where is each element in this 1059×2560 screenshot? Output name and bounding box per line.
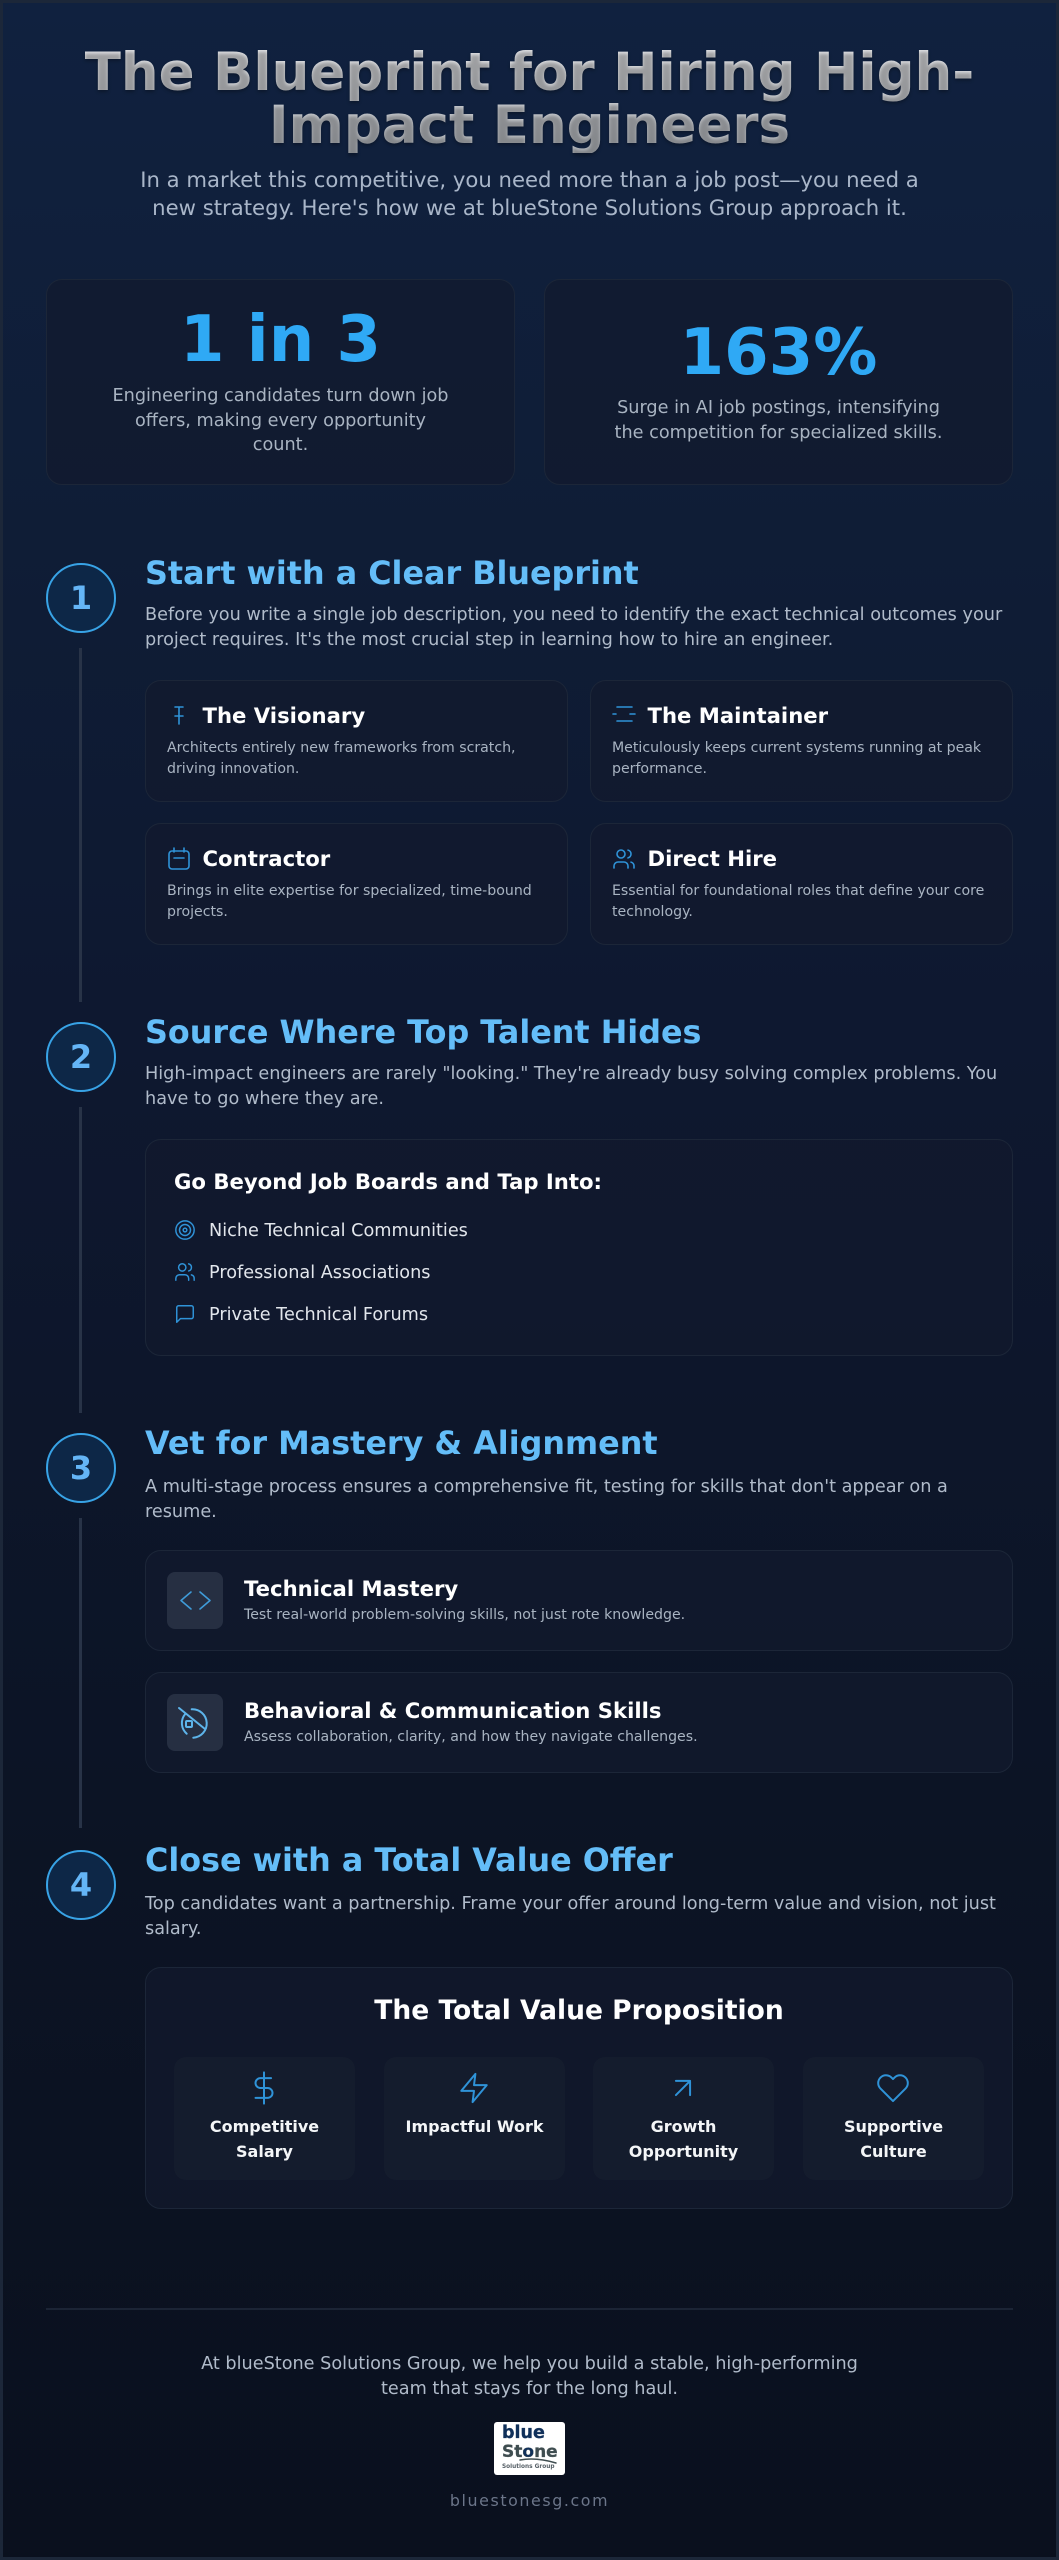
- label: Competitive: [210, 2117, 319, 2136]
- card: Behavioral and Communication Skills: [145, 1672, 1013, 1773]
- icon: dollar: [254, 2071, 274, 2105]
- logo: [494, 2422, 565, 2475]
- card text: [612, 740, 981, 777]
- list item: Professional Associations: [209, 1263, 430, 1283]
- step description: High-impact engineers are rarely "looking." They're already busy solving complex problems. You: [145, 1064, 997, 1084]
- step heading: Start with a Clear Blueprint: [145, 554, 639, 592]
- card text: Test real-world problem-solving skills, not just rote knowledge.: [244, 1606, 685, 1622]
- subtitle: new strategy. Here's how we at blueStone Solutions Group approach it.: [152, 195, 907, 220]
- step number 2: 2: [70, 1038, 92, 1076]
- card title: The Maintainer: [648, 702, 828, 728]
- card text: Essential for foundational roles that define your core: [612, 882, 984, 898]
- icon: calendar: [168, 847, 190, 870]
- label: [629, 2117, 738, 2161]
- card: Total Value Proposition: [145, 1967, 1013, 2209]
- card: The Maintainer: [590, 680, 1013, 802]
- card: Contractor: [145, 823, 568, 945]
- card: The Visionary: [145, 680, 568, 802]
- stat description: [112, 386, 449, 455]
- card text: projects.: [167, 904, 228, 920]
- step number 4: [46, 1850, 116, 1920]
- value: Competitive Salary: [174, 2057, 355, 2180]
- card text: [167, 882, 532, 920]
- section: step 1: [46, 554, 1013, 1002]
- card text: [612, 882, 984, 920]
- value: Growth Opportunity: [593, 2057, 774, 2180]
- icon: arrow up right: [674, 2080, 692, 2096]
- card title: Contractor: [202, 846, 330, 870]
- label: [844, 2117, 943, 2161]
- card: channels list: [145, 1139, 1013, 1356]
- value: Supportive Culture: [803, 2057, 984, 2180]
- step number 4: 4: [70, 1866, 92, 1904]
- stat number: 163%: [680, 316, 877, 390]
- section: step 2: [46, 1014, 1013, 1413]
- icon: users: [175, 1263, 195, 1281]
- card heading: The Total Value Proposition: [374, 1995, 784, 2026]
- step description: have to go where they are.: [145, 1089, 384, 1109]
- icon box: brain: [167, 1694, 223, 1751]
- list heading: Go Beyond Job Boards and Tap Into:: [174, 1168, 602, 1194]
- card title: Direct Hire: [648, 846, 777, 870]
- card text: [167, 740, 516, 777]
- step description: [145, 1064, 997, 1109]
- label: Supportive: [844, 2117, 943, 2136]
- label: Opportunity: [629, 2142, 738, 2161]
- title: [3, 46, 1056, 153]
- step number 3: [46, 1433, 116, 1503]
- label: Salary: [236, 2142, 293, 2161]
- card title: The Visionary: [202, 702, 365, 728]
- step number 1: 1: [70, 579, 92, 617]
- step description: Before you write a single job description, you need to identify the exact technical outcomes your: [145, 605, 1002, 625]
- card text: Architects entirely new frameworks from scratch,: [167, 740, 516, 756]
- card text: Meticulously keeps current systems running at peak: [612, 740, 981, 756]
- step description: salary.: [145, 1918, 202, 1938]
- stat description: Surge in AI job postings, intensifying: [617, 398, 940, 418]
- card title: Technical Mastery: [244, 1576, 458, 1601]
- icon: users: [613, 849, 635, 869]
- stat description: Engineering candidates turn down job: [112, 386, 449, 406]
- stat description: offers, making every opportunity: [135, 411, 426, 431]
- step number 2: [46, 1022, 116, 1092]
- subtitle: In a market this competitive, you need more than a job post—you need a: [140, 167, 919, 192]
- icon: heart: [877, 2074, 909, 2102]
- footer text: At blueStone Solutions Group, we help you build a stable, high-performing: [201, 2354, 858, 2374]
- card text: technology.: [612, 904, 693, 920]
- logo: Stone: [502, 2442, 558, 2462]
- subtitle: [140, 167, 919, 220]
- card: Technical Mastery: [145, 1550, 1013, 1651]
- icon: message square: [176, 1305, 194, 1323]
- step description: [145, 605, 1002, 650]
- footer text: team that stays for the long haul.: [381, 2379, 678, 2399]
- icon: text cursor: [174, 706, 184, 725]
- label: Culture: [860, 2142, 927, 2161]
- stat description: [615, 398, 942, 443]
- label: [210, 2117, 319, 2161]
- logo: blue: [502, 2423, 545, 2443]
- step description: project requires. It's the most crucial step in learning how to hire an engineer.: [145, 630, 833, 650]
- card text: driving innovation.: [167, 761, 299, 777]
- list item: Private Technical Forums: [209, 1305, 428, 1325]
- step heading: Source Where Top Talent Hides: [145, 1014, 701, 1050]
- step description: Top candidates want a partnership. Frame your offer around long-term value and vision, not just: [145, 1894, 996, 1914]
- icon box: code: [167, 1572, 223, 1629]
- list item: Niche Technical Communities: [209, 1221, 468, 1241]
- step number 3: 3: [70, 1449, 92, 1487]
- panel: stat 163%: [544, 279, 1013, 485]
- step description: resume.: [145, 1502, 217, 1522]
- card title: Behavioral & Communication Skills: [244, 1698, 661, 1723]
- step description: A multi-stage process ensures a comprehensive fit, testing for skills that don't appear on a: [145, 1476, 948, 1496]
- logo: Solutions Group: [502, 2464, 554, 2470]
- step heading: Close with a Total Value Offer: [145, 1842, 673, 1879]
- card text: Brings in elite expertise for specialized, time-bound: [167, 882, 532, 898]
- value: Impactful Work: [384, 2057, 565, 2180]
- label: Growth: [651, 2117, 716, 2136]
- card: Direct Hire: [590, 823, 1013, 945]
- step description: [144, 1894, 996, 1938]
- footer text: [201, 2354, 858, 2399]
- card text: performance.: [612, 761, 707, 777]
- icon: align lines: [612, 706, 636, 722]
- step heading: Vet for Mastery & Alignment: [145, 1425, 658, 1462]
- title: Impact Engineers: [269, 95, 790, 156]
- panel: stat 1 in 3: [46, 279, 515, 485]
- stat description: count.: [253, 435, 308, 455]
- step number 1: [46, 563, 116, 633]
- icon: target: [175, 1220, 195, 1240]
- stat number: 1 in 3: [180, 303, 381, 377]
- section: step 3: [46, 1425, 1013, 1828]
- website: bluestonesg.com: [450, 2491, 609, 2510]
- title: The Blueprint for Hiring High-: [85, 42, 974, 103]
- icon: lightning: [460, 2072, 488, 2104]
- card text: Assess collaboration, clarity, and how they navigate challenges.: [244, 1728, 698, 1744]
- label: Impactful Work: [405, 2117, 544, 2136]
- step description: [145, 1476, 948, 1522]
- section: step 4: [46, 1842, 1013, 2209]
- stat description: the competition for specialized skills.: [615, 423, 942, 443]
